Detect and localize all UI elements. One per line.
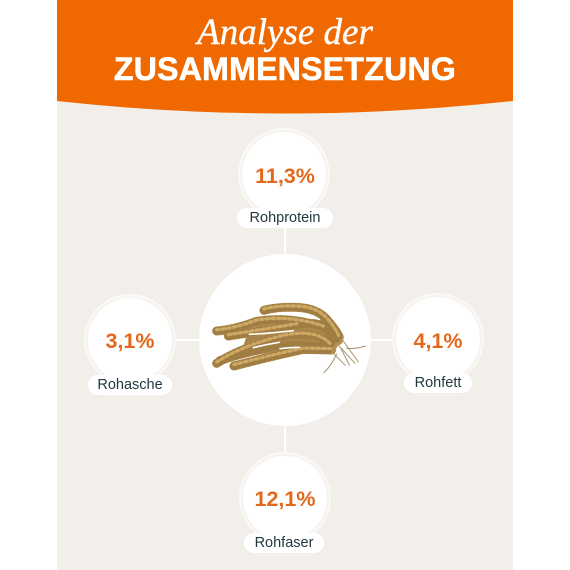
bubble: Rohfaser <box>239 452 331 553</box>
label: Rohfett <box>415 375 461 391</box>
value: 4,1% <box>413 329 462 353</box>
value: 11,3% <box>255 164 315 188</box>
value: 12,1% <box>255 487 315 511</box>
bubble: Rohasche <box>84 294 176 395</box>
label <box>237 208 333 228</box>
circle <box>392 293 484 385</box>
bubble: Rohprotein <box>237 128 333 228</box>
label: Rohfaser <box>255 535 313 551</box>
title <box>114 12 456 87</box>
panel: background <box>57 0 513 570</box>
circle <box>239 452 331 544</box>
title line: Analyse der: Analyse der <box>197 12 373 53</box>
connector lines <box>176 228 392 452</box>
circle <box>238 128 330 220</box>
label <box>244 533 324 553</box>
label <box>404 373 472 393</box>
circle <box>84 294 176 386</box>
label: Rohasche <box>97 377 163 393</box>
label: Rohprotein <box>250 210 320 226</box>
title line: ZUSAMMENSETZUNG: ZUSAMMENSETZUNG <box>114 51 456 87</box>
bubble: Rohfett <box>392 293 484 393</box>
center circle with millet image <box>199 254 371 426</box>
icon: millet sprays <box>212 302 366 374</box>
label <box>88 375 172 395</box>
value: 3,1% <box>105 329 154 353</box>
header banner <box>57 0 513 114</box>
